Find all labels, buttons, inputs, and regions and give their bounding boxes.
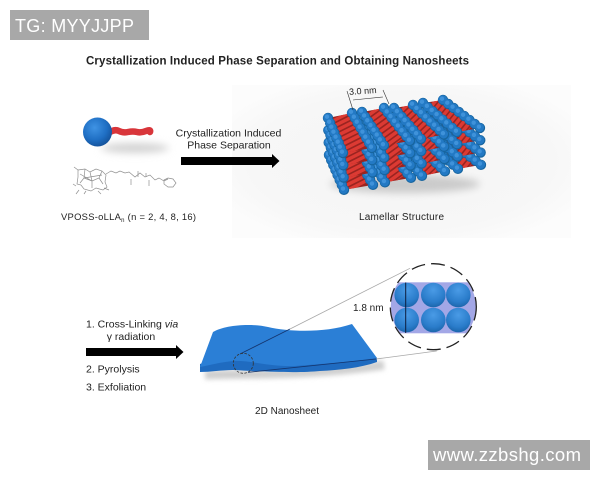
arrow: cross-linking (86, 345, 184, 359)
zoom guide lines (240, 268, 437, 372)
dimension: 3.0 nm: 3.0 nm (349, 85, 377, 97)
layer 2 (327, 111, 480, 165)
steps text: 1. Cross-Linking via (86, 318, 178, 330)
background: lamellar panel (232, 85, 571, 238)
arrow label: crystallization: Phase Separation (187, 140, 271, 152)
icon: VPOSS-oLLA molecule ball and tail (83, 118, 169, 153)
layer 1 (327, 99, 480, 153)
magnified lens (390, 264, 477, 350)
chemical structure (73, 167, 176, 194)
lamellar structure (327, 99, 481, 193)
dimension: 3.0 nm (347, 85, 389, 110)
label: VPOSS-oLLA: n (121, 218, 125, 224)
layer 4 (328, 136, 481, 190)
watermark: bottom right (428, 440, 590, 470)
steps text (86, 318, 178, 394)
steps text: γ radiation (107, 331, 155, 343)
arrow: crystallization (181, 154, 280, 168)
label: 2D nanosheet: 2D Nanosheet (255, 406, 319, 417)
dimension arrow (405, 282, 407, 333)
2D nanosheet (200, 324, 384, 375)
lens background (390, 282, 477, 333)
layer 3 (328, 123, 481, 178)
label: VPOSS-oLLA: (n = 2, 4, 8, 16) (125, 211, 196, 222)
label: VPOSS-oLLA: VPOSS-oLLA (61, 211, 121, 222)
label: 1.8 nm: 1.8 nm (353, 303, 384, 314)
arrow label: crystallization (176, 128, 281, 152)
steps text: 2. Pyrolysis (86, 364, 140, 376)
watermark: top left (10, 10, 149, 40)
spheres (394, 283, 471, 332)
watermark: top left: TG: MYYJJPP (15, 16, 134, 36)
watermark: bottom right: www.zzbshg.com (432, 444, 581, 465)
dashed circle: sheet detail (233, 353, 253, 373)
dashed circle (390, 264, 476, 350)
title: Crystallization Induced Phase Separation and Obtaining Nanosheets (86, 56, 469, 68)
label: lamellar structure: Lamellar Structure (359, 212, 444, 223)
arrow label: crystallization: Crystallization Induced (176, 128, 281, 140)
steps text: 3. Exfoliation (86, 382, 146, 394)
